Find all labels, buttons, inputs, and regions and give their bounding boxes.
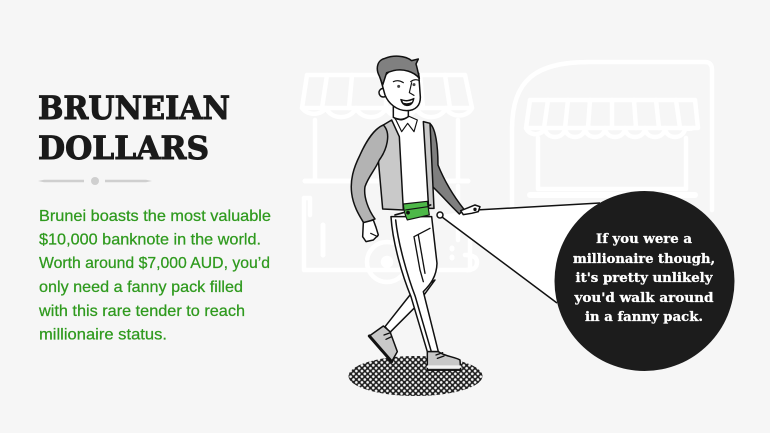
fanny pack bbox=[395, 201, 431, 220]
title bbox=[38, 89, 230, 167]
back leg bbox=[385, 280, 435, 332]
body text: $10,000 banknote in the world. bbox=[39, 232, 261, 248]
head bbox=[377, 56, 420, 119]
right vest panel bbox=[423, 122, 434, 208]
callout text: in a fanny pack. bbox=[585, 310, 703, 325]
illustration: man walking with fanny pack bbox=[351, 56, 480, 370]
back shoe bbox=[369, 326, 397, 362]
callout text: millionaire though, bbox=[573, 252, 715, 267]
callout text: you'd walk around bbox=[573, 291, 714, 306]
body text: Brunei boasts the most valuable bbox=[39, 208, 271, 225]
body text: only need a fanny pack filled bbox=[39, 279, 243, 296]
title: DOLLARS bbox=[38, 129, 209, 167]
left vest panel bbox=[378, 120, 403, 210]
left sleeve bbox=[351, 125, 388, 223]
body text bbox=[38, 208, 271, 344]
hands bbox=[363, 205, 480, 242]
callout cone bbox=[440, 203, 644, 303]
callout pointer lines bbox=[437, 203, 600, 303]
callout text bbox=[573, 232, 715, 325]
body text: millionaire status. bbox=[39, 326, 167, 344]
right sleeve bbox=[429, 123, 464, 214]
background icon: market stall bbox=[302, 75, 477, 282]
front leg bbox=[391, 217, 438, 352]
divider bbox=[38, 177, 152, 185]
callout text: If you were a bbox=[596, 232, 693, 247]
torso bbox=[351, 116, 464, 223]
body text: Worth around $7,000 AUD, you’d bbox=[39, 255, 270, 272]
callout bubble bbox=[554, 191, 734, 371]
callout text: it's pretty unlikely bbox=[576, 271, 713, 286]
background icon: shop front bbox=[512, 62, 712, 210]
title: BRUNEIAN bbox=[38, 89, 230, 127]
body text: with this rare tender to reach bbox=[38, 303, 245, 320]
front shoe bbox=[427, 352, 461, 370]
ground shadow halftone bbox=[348, 356, 482, 396]
